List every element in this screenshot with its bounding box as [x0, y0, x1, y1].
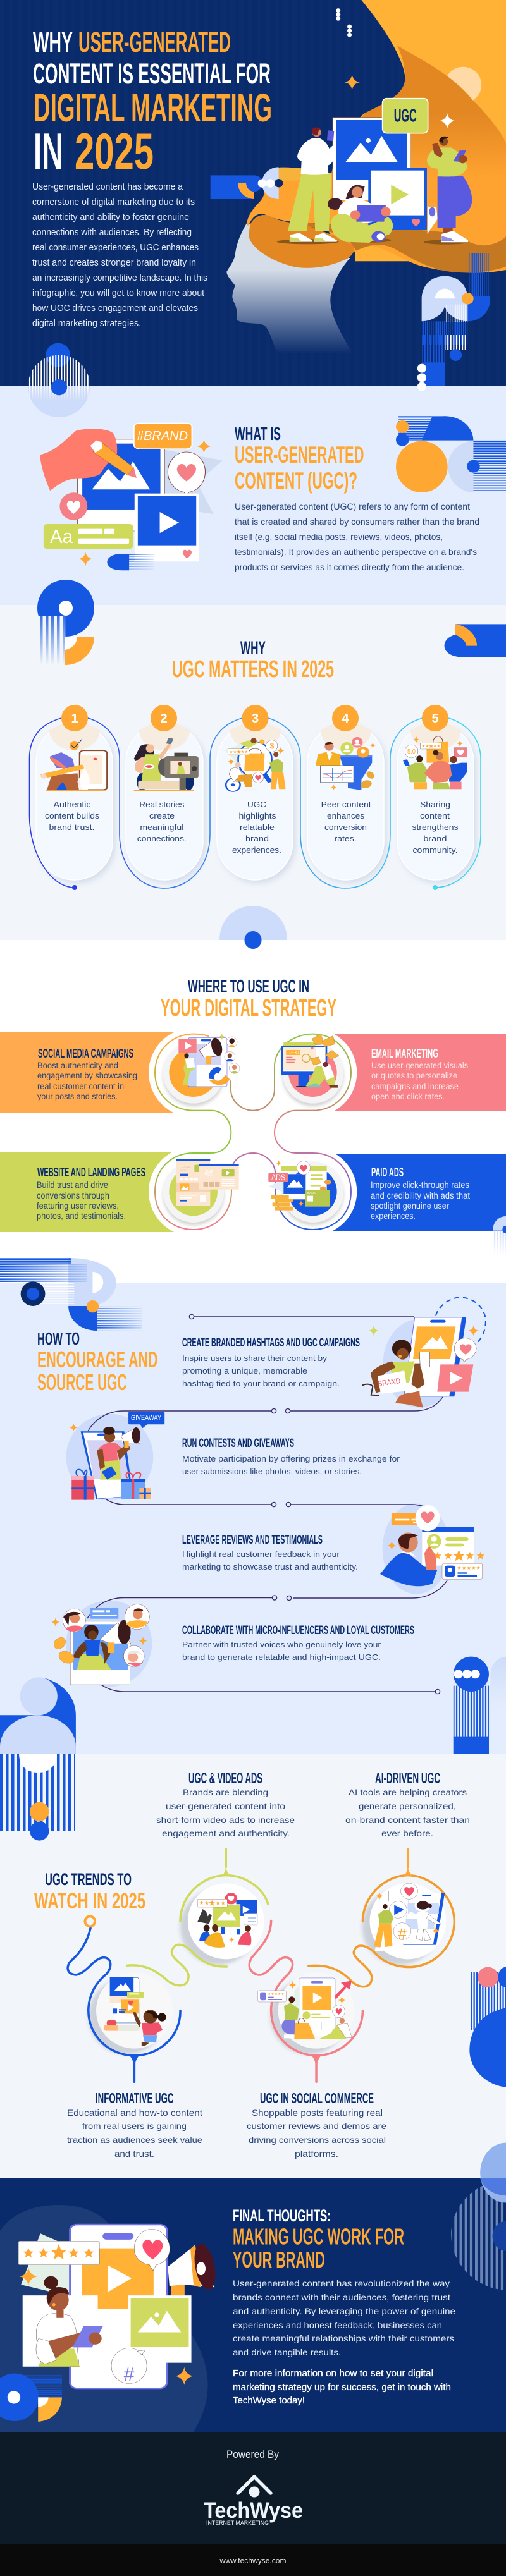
trend block: AI-driven UGC: [345, 1770, 470, 1838]
call to action: For more information on how to set your digital: [233, 2369, 433, 2379]
block: email marketing: [371, 1047, 468, 1101]
text block: that is created and shared by consumers rather than the brand: [235, 516, 479, 527]
card 2 text: connections.: [137, 834, 187, 843]
trend circles with shadows: [89, 1883, 446, 2054]
illustration labels: PAGE: [204, 1173, 213, 1177]
heading: SOURCE UGC: [37, 1369, 126, 1395]
text block: [235, 501, 479, 572]
block: email marketing: campaigns and increase: [371, 1082, 459, 1091]
card 3 text: experiences.: [232, 845, 281, 855]
powered by text: Powered By: [226, 2448, 279, 2460]
trend block: social commerce: UGC IN SOCIAL COMMERCE: [260, 2090, 374, 2106]
card 5 text: strengthens: [412, 822, 459, 832]
step text: reviews and testimonials: [182, 1534, 358, 1572]
heading: USER-GENERATED: [235, 442, 364, 468]
decoration: right shapes: [469, 1967, 506, 2203]
heading: [172, 638, 334, 683]
icon: image card: [128, 2295, 192, 2363]
hero text block: infographic, you will get to know more about: [32, 288, 204, 298]
serpentine connector lines: [155, 1034, 351, 1230]
icon: giveaway tag: [128, 1412, 164, 1428]
block: paid ads: Improve click-through rates: [371, 1180, 469, 1190]
icon: social media illustration: [178, 1034, 240, 1087]
icon: paid ads illustration: [268, 1160, 331, 1211]
band: social media: [0, 1032, 190, 1113]
number badges: [61, 705, 448, 731]
hub discs: [149, 1028, 357, 1236]
illustration labels: Aa: [50, 525, 73, 547]
step text: contests and giveaways: [182, 1437, 400, 1476]
step text: reviews and testimonials: Highlight real customer feedback in your: [182, 1549, 340, 1559]
decoration: section boundary shapes: [0, 1657, 506, 1773]
trend headings: top row: UGC & VIDEO ADS: [188, 1770, 262, 1787]
heading: YOUR DIGITAL STRATEGY: [161, 995, 336, 1022]
trend block: informative UGC: Educational and how-to content: [67, 2108, 202, 2118]
card 5 text: Sharing: [420, 800, 450, 809]
hero illustration: head with orange blob and people: [211, 0, 506, 353]
title: DIGITAL MARKETING: [34, 86, 272, 130]
heading: WHERE TO USE UGC IN: [188, 977, 309, 997]
footer url: www.techwyse.com: [219, 2556, 286, 2565]
icon: email illustration: [281, 1034, 339, 1088]
block: website and landing pages: featuring user reviews,: [37, 1201, 119, 1211]
illustration labels: PAGE: [180, 1169, 187, 1172]
block: paid ads: PAID ADS: [371, 1166, 404, 1180]
icon: step 3 illustration: [380, 1505, 484, 1586]
title: 2025: [75, 123, 154, 180]
block: email marketing: open and click rates.: [371, 1092, 445, 1101]
illustration: phone, woman and content: [0, 2225, 219, 2422]
hero text block: real consumer experiences, UGC enhances: [32, 243, 199, 253]
trend headings: top row: [156, 1770, 295, 1838]
trend block: informative UGC: and trust.: [114, 2149, 154, 2159]
block: website and landing pages: Build trust and drive: [37, 1180, 108, 1190]
hero text block: User-generated content has become a: [32, 182, 183, 192]
icon: social commerce illustration: [257, 1978, 352, 2039]
step text: reviews and testimonials: marketing to showcase trust and authenticity.: [182, 1562, 358, 1572]
text block: experiences and honest feedback, businesses can: [233, 2320, 442, 2330]
hero text block: digital marketing strategies.: [32, 319, 141, 329]
pale circles behind steps: [66, 1319, 456, 1687]
step text: micro-influencers: brand to generate relatable and high-impact UGC.: [182, 1652, 381, 1662]
heading: [235, 424, 364, 494]
step text: contests and giveaways: user submissions like photos, videos, or stories.: [182, 1467, 362, 1476]
icon: website illustration: [176, 1159, 239, 1206]
illustration labels: $: [270, 742, 275, 750]
connecting line: [29, 718, 481, 888]
block: website and landing pages: conversions through: [37, 1191, 109, 1200]
logo: TechWyse: INTERNET MARKETING: [206, 2520, 269, 2527]
hero text block: [32, 182, 207, 329]
illustration labels: BANK: [307, 1192, 316, 1195]
card 5 text: brand: [423, 834, 447, 843]
logo: TechWyse: [204, 2477, 303, 2527]
heading: UGC TRENDS TO: [45, 1870, 132, 1889]
icon: hashtag bubble: [111, 2348, 147, 2383]
hero text block: connections with audiences. By reflecting: [32, 228, 192, 238]
hero text block: how UGC drives engagement and elevates: [32, 303, 198, 314]
icon: step 4 illustration: [51, 1604, 149, 1685]
panel: why UGC matters: [29, 580, 506, 949]
trend block: informative UGC: traction as audiences seek value: [67, 2135, 202, 2145]
icon: step 1 illustration: [362, 1297, 486, 1408]
icon: heart bubble: [168, 452, 205, 495]
icon: text card: [44, 524, 133, 549]
step connector lines: [87, 1314, 447, 1694]
end dots: [72, 885, 438, 890]
icon: video ads illustration: [197, 1893, 257, 1948]
trend headings: top row: short-form video ads to increase: [156, 1815, 295, 1825]
heading: WHY: [240, 638, 266, 659]
title: WHY: [33, 26, 73, 58]
illustration labels: ADS: [271, 1172, 285, 1182]
illustration label: hash: #: [398, 1926, 407, 1943]
heading: [233, 2206, 404, 2273]
text block: create meaningful relationships with their customers: [233, 2333, 454, 2343]
number badges: 2: [160, 712, 168, 726]
block: social media campaigns: real customer content in: [37, 1082, 124, 1091]
card 4 text: [321, 800, 371, 843]
heading: ENCOURAGE AND: [37, 1346, 157, 1372]
card 2 text: [137, 800, 187, 843]
panel: what is UGC: [28, 335, 506, 572]
icon: AI-driven illustration: [374, 1883, 445, 1951]
card 4 text: enhances: [327, 811, 365, 821]
card 1 text: [45, 800, 100, 832]
card 4 text: conversion: [324, 822, 367, 832]
block: social media campaigns: Boost authenticity and: [37, 1061, 118, 1070]
illustration labels: [180, 1050, 316, 1195]
card 1 text: content builds: [45, 811, 100, 821]
title: [33, 26, 272, 180]
step text: micro-influencers: Partner with trusted voices who genuinely love your: [182, 1640, 381, 1649]
illustration: brand content creation: [40, 423, 223, 570]
icon: standing man with tablet: [427, 137, 472, 242]
panel: hero: [32, 0, 506, 353]
card 2 text: create: [149, 811, 175, 821]
text block: products or services as it comes directly from the audience.: [235, 562, 464, 572]
trend block: AI-driven UGC: on-brand content faster than: [345, 1815, 470, 1825]
card 3 text: UGC: [247, 800, 266, 809]
trend headings: top row: user-generated content into: [166, 1801, 285, 1811]
icon: video card: [368, 168, 427, 230]
hero text block: authenticity and ability to foster genuine: [32, 212, 189, 223]
icon: megaphone: [168, 2243, 219, 2296]
panel: where to use UGC: [0, 977, 506, 1331]
trend headings: top row: engagement and authenticity.: [162, 1828, 290, 1838]
text block: and authenticity. By leveraging the power of genuine: [233, 2306, 455, 2316]
icon: brand tag: [134, 423, 192, 449]
icon: heart bubble: [134, 2229, 170, 2271]
block: email marketing: or quotes to personalize: [371, 1071, 457, 1080]
heading: CONTENT (UGC)?: [235, 468, 357, 494]
block: paid ads: experiences.: [371, 1211, 416, 1221]
step text: micro-influencers: [182, 1624, 414, 1662]
trend block: social commerce: [247, 2090, 386, 2159]
card 1 text: brand trust.: [49, 822, 95, 832]
icon: hand with pencil: [40, 429, 137, 491]
trend block: social commerce: customer reviews and demos are: [247, 2121, 386, 2131]
illustration labels: 5.0: [407, 748, 416, 755]
illustration labels: TEXT: [288, 1050, 300, 1056]
icon: standing man: [288, 127, 337, 242]
heading: [161, 977, 336, 1022]
icon: card 5 illustration: [403, 736, 467, 789]
heading: WHAT IS: [235, 424, 281, 444]
text block: User-generated content (UGC) refers to any form of content: [235, 501, 470, 511]
card 3 text: [232, 800, 281, 855]
decoration: circle with stripes: [37, 580, 94, 665]
heading: FINAL THOUGHTS:: [233, 2206, 331, 2225]
number badges: 3: [252, 712, 259, 726]
title: IN: [34, 123, 63, 180]
illustration labels: LANDING: [180, 1166, 191, 1169]
trend block: social commerce: platforms.: [295, 2149, 338, 2159]
decoration: arch with stripes: [422, 253, 490, 345]
heading: WATCH IN 2025: [34, 1889, 145, 1914]
step text: branded hashtags: promoting a unique, memorable: [182, 1366, 307, 1376]
heading: [37, 1329, 157, 1395]
icon: rating card: [18, 2241, 99, 2265]
block: paid ads: [371, 1166, 470, 1221]
call to action: TechWyse today!: [233, 2396, 305, 2406]
band: paid ads: [316, 1154, 506, 1231]
heading: UGC MATTERS IN 2025: [172, 656, 334, 683]
logo: TechWyse: TechWyse: [204, 2498, 303, 2523]
label: hash: #: [124, 2364, 135, 2385]
panel: powered by: [204, 2448, 303, 2565]
block: social media campaigns: [37, 1047, 137, 1101]
call to action: marketing strategy up for success, get in touch with: [233, 2383, 451, 2393]
icon: UGC tag: [383, 99, 428, 168]
illustration labels: [270, 742, 416, 755]
card 3 text: brand: [245, 834, 269, 843]
decoration: left stripes column: [0, 1754, 75, 1841]
icon: woman with tablet: [23, 2276, 103, 2367]
hero text block: trust and creates stronger brand loyalty in: [32, 258, 196, 268]
number badges: 5: [431, 712, 439, 726]
trend block: informative UGC: INFORMATIVE UGC: [96, 2090, 173, 2106]
card 2 text: meaningful: [140, 822, 184, 832]
icon: card 4 illustration: [316, 737, 376, 790]
card 5 text: content: [420, 811, 450, 821]
block: social media campaigns: engagement by showcasing: [37, 1071, 137, 1080]
icon: card 2 illustration: [134, 738, 199, 791]
band: email: [316, 1034, 506, 1111]
block: email marketing: Use user-generated visuals: [371, 1061, 468, 1070]
illustration labels: HOME: [204, 1170, 214, 1174]
label: UGC: UGC: [394, 106, 417, 126]
icon: sitting woman with tablet: [328, 185, 393, 243]
call to action: [233, 2369, 451, 2406]
trend block: social commerce: driving conversions across social: [249, 2135, 386, 2145]
card 3 text: highlights: [239, 811, 276, 821]
decoration: bottom left shapes: [0, 2374, 62, 2422]
step text: contests and giveaways: RUN CONTESTS AND GIVEAWAYS: [182, 1437, 294, 1450]
block: website and landing pages: WEBSITE AND LANDING PAGES: [37, 1166, 145, 1180]
flowing trend lines: [68, 1849, 454, 2082]
trend block: AI-driven UGC: AI-DRIVEN UGC: [375, 1770, 440, 1787]
illustration labels: [131, 1376, 401, 1422]
hero text block: cornerstone of digital marketing due to its: [32, 197, 195, 207]
trend block: AI-driven UGC: AI tools are helping creators: [349, 1787, 467, 1797]
decoration: stripe circles at section boundary: [28, 335, 467, 417]
icon: image panel: [333, 118, 410, 200]
block: social media campaigns: SOCIAL MEDIA CAMPAIGNS: [38, 1047, 133, 1061]
illustration labels: GIVEAWAY: [131, 1414, 162, 1422]
block: website and landing pages: photos, and testimonials.: [37, 1211, 126, 1221]
text block: brands connect with their audiences, fostering trust: [233, 2292, 450, 2302]
decoration: left stripes shape: [0, 1258, 142, 1331]
step text: reviews and testimonials: LEVERAGE REVIEWS AND TESTIMONIALS: [182, 1534, 323, 1547]
card 5 text: community.: [412, 845, 458, 855]
block: website and landing pages: [37, 1166, 145, 1221]
block: email marketing: EMAIL MARKETING: [371, 1047, 438, 1061]
heading: [34, 1870, 145, 1914]
decoration: background blob: [0, 2205, 208, 2432]
title: USER-GENERATED: [78, 26, 231, 58]
trend block: informative UGC: from real users is gaining: [82, 2121, 187, 2131]
icon: video card: [135, 494, 199, 561]
number badges: 4: [342, 712, 349, 726]
block: paid ads: and credibility with ads that: [371, 1191, 470, 1200]
text block: [233, 2278, 455, 2357]
decoration: right geometric shapes: [396, 416, 506, 492]
illustration labels: #BRAND: [137, 429, 188, 443]
card 4 text: rates.: [335, 834, 357, 843]
title: CONTENT IS ESSENTIAL FOR: [33, 58, 271, 90]
step text: contests and giveaways: Motivate participation by offering prizes in exchange for: [182, 1454, 400, 1463]
card shadows and bodies: [36, 724, 476, 883]
step text: branded hashtags: [182, 1336, 360, 1388]
step text: branded hashtags: CREATE BRANDED HASHTAGS AND UGC CAMPAIGNS: [182, 1336, 360, 1350]
band: website: [0, 1152, 190, 1232]
card 5 text: [412, 800, 459, 855]
icon: card 3 illustration: [225, 738, 286, 791]
illustration labels: [50, 429, 188, 547]
text block: User-generated content has revolutionized the way: [233, 2278, 450, 2288]
block: social media campaigns: your posts and stories.: [37, 1092, 118, 1101]
number badges: 1: [71, 712, 78, 726]
step text: branded hashtags: Inspire users to share their content by: [182, 1353, 328, 1363]
icon: blue tab with circles: [211, 167, 283, 199]
icon: striped pill: [107, 554, 154, 570]
heading: YOUR BRAND: [233, 2247, 325, 2273]
illustration labels: BRAND: [377, 1376, 401, 1388]
card 3 text: relatable: [240, 822, 275, 832]
step text: branded hashtags: hashtag tied to your brand or campaign.: [182, 1379, 340, 1388]
icon: heart circle: [59, 492, 87, 520]
decoration: right arch: [493, 1216, 506, 1252]
icon: step 2 illustration: [70, 1412, 164, 1500]
decoration: top right blue shape: [445, 624, 506, 657]
card 2 text: Real stories: [139, 800, 185, 809]
text block: testimonials). It provides an authentic perspective on a brand's: [235, 547, 477, 557]
text block: and drive tangible results.: [233, 2347, 341, 2357]
panel: UGC trends: [0, 1754, 506, 2203]
icon: card 1 illustration: [40, 739, 107, 791]
trend block: AI-driven UGC: generate personalized,: [359, 1801, 456, 1811]
hero text block: an increasingly competitive landscape. In this: [32, 273, 207, 283]
trend block: AI-driven UGC: ever before.: [381, 1828, 433, 1838]
card 1 text: Authentic: [53, 800, 91, 809]
decoration: section boundary arch: [219, 906, 287, 949]
panel: final thoughts: [0, 2178, 506, 2432]
trend block: social commerce: Shoppable posts featuring real: [252, 2108, 383, 2118]
text block: itself (e.g. social media posts, reviews, videos, photos,: [235, 532, 443, 542]
panel: how to encourage and source UGC: [0, 1297, 506, 1773]
heading: HOW TO: [37, 1329, 80, 1348]
card 4 text: Peer content: [321, 800, 371, 809]
block: paid ads: spotlight genuine user: [371, 1201, 449, 1211]
trend headings: top row: Brands are blending: [183, 1787, 268, 1797]
decoration: right stripes circle: [451, 2178, 506, 2290]
trend block: informative UGC: [67, 2090, 202, 2159]
icon: informative illustration: [104, 1977, 166, 2046]
